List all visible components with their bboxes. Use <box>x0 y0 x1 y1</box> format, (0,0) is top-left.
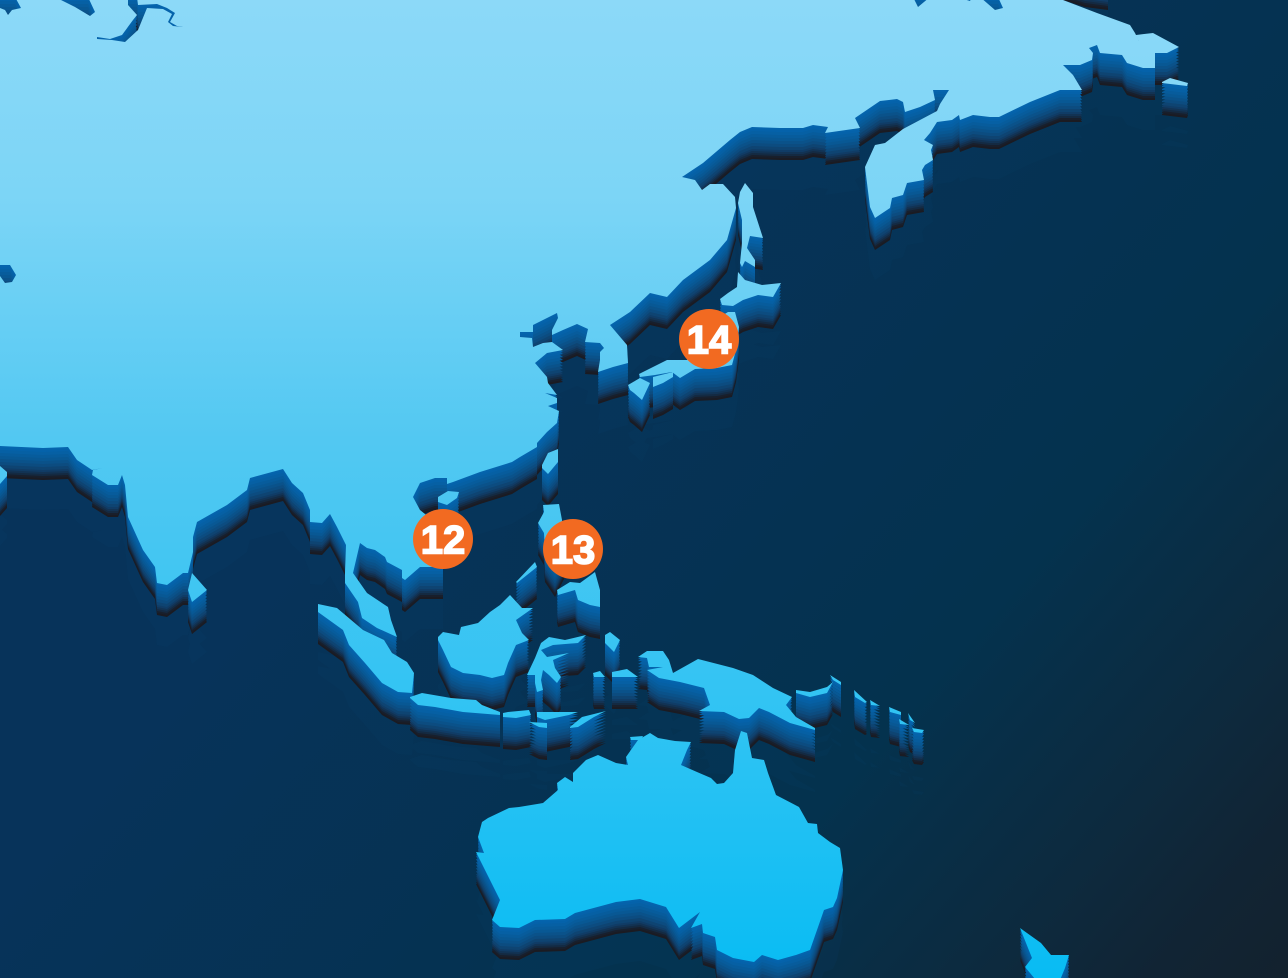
marker 14 <box>679 309 739 369</box>
landmass: New Zealand <box>1020 928 1069 978</box>
marker 12: 12 <box>421 518 465 562</box>
marker 13: 13 <box>551 528 595 572</box>
landmass: New Guinea and Pacific islands <box>638 651 924 765</box>
marker 13 <box>543 519 603 579</box>
marker 14: 14 <box>687 318 732 362</box>
landmass: Indonesia and Borneo <box>318 595 638 760</box>
landmass: Japan and Sakhalin <box>628 183 781 432</box>
landmass: Australia <box>476 731 843 978</box>
landmass: mainland Asia <box>0 0 1188 669</box>
landmass: Hainan, Taiwan and the Philippines <box>438 449 600 639</box>
marker 12 <box>413 509 473 569</box>
